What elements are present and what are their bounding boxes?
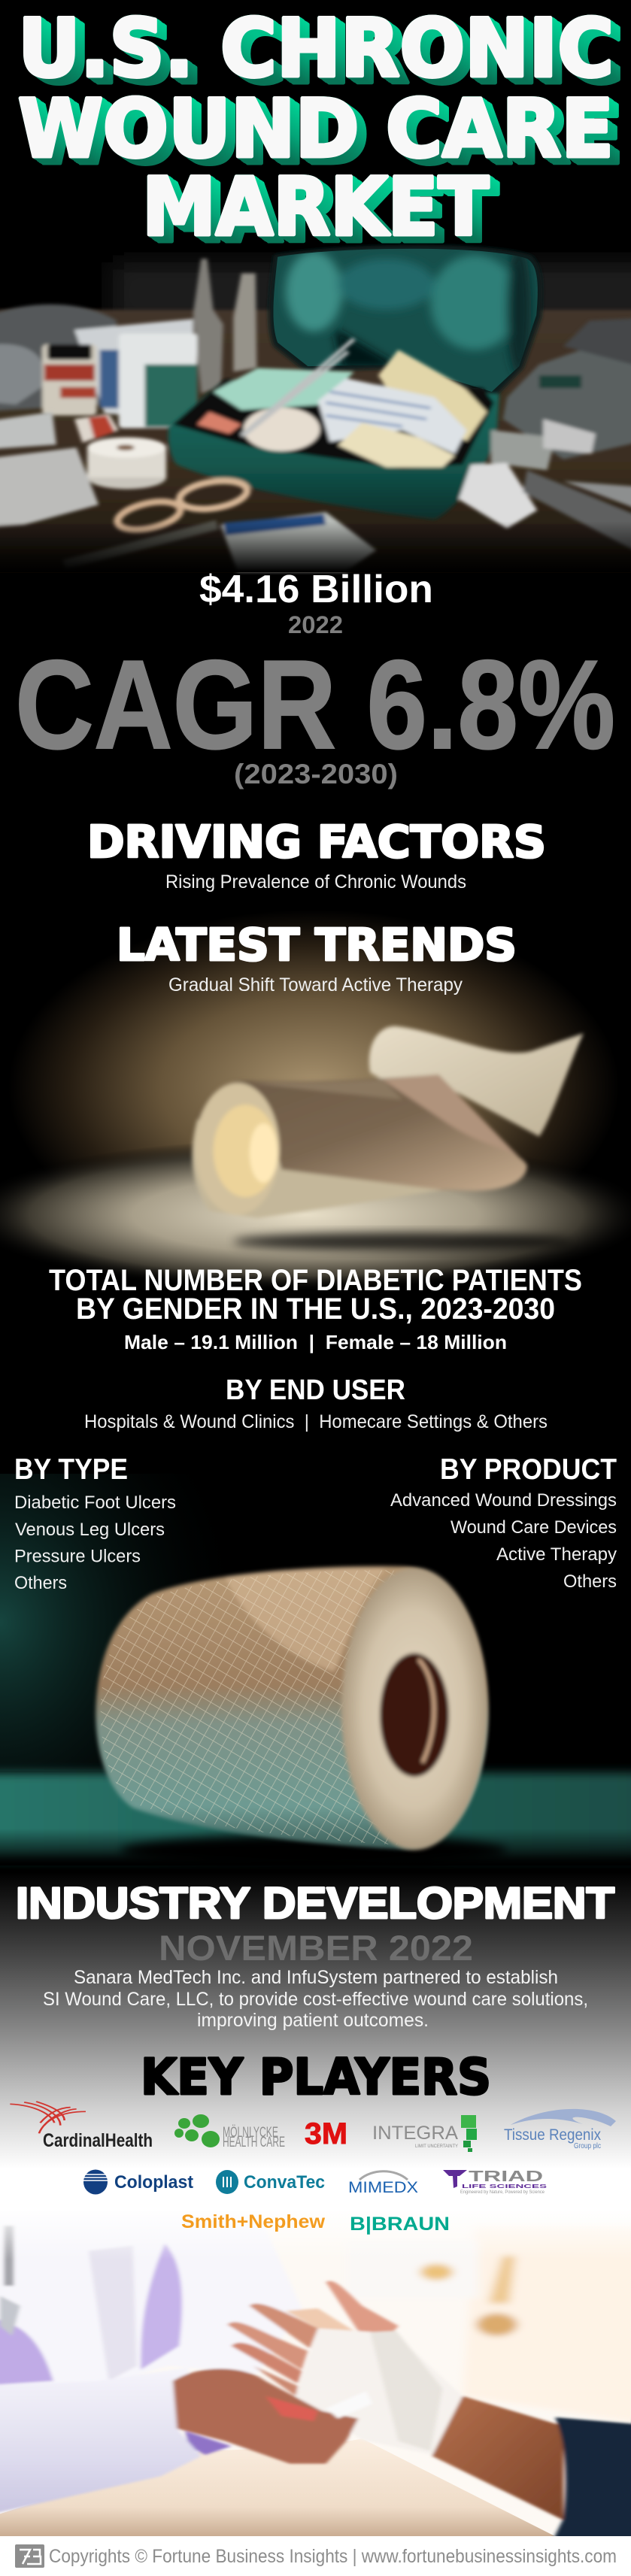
footer logo (15, 2544, 44, 2568)
logo: Integra (372, 2115, 477, 2152)
logo: Cardinal Health (10, 2102, 153, 2151)
logo: Tissue Regenix (504, 2109, 616, 2150)
logo: Tissue Regenix: Tissue Regenix (504, 2126, 601, 2144)
by product list (390, 1453, 617, 1592)
by type list: Diabetic Foot Ulcers (14, 1493, 176, 1513)
photo: tissue roll under spotlight (0, 910, 631, 1291)
diabetic patients stat: BY GENDER IN THE U.S., 2023-2030 (76, 1293, 555, 1326)
by product list: Active Therapy (496, 1544, 617, 1565)
white fade into photo (0, 2207, 631, 2259)
market value: $4.16 Billion (199, 568, 433, 611)
by end user: BY END USER (226, 1374, 405, 1406)
logo: Triad Life Sciences (443, 2168, 548, 2195)
industry development: INDUSTRY DEVELOPMENT (16, 1879, 614, 1928)
development description: Sanara MedTech Inc. and InfuSystem partnered to establish (74, 1967, 558, 1988)
logo: Triad Life Sciences: LIFE SCIENCES (462, 2184, 548, 2190)
market value (199, 568, 433, 638)
by end user (84, 1374, 548, 1432)
logo: Triad Life Sciences: Engineered by Nature, Powered by Science (460, 2190, 545, 2195)
by type list: Venous Leg Ulcers (15, 1520, 165, 1540)
market value: 2022 (288, 611, 343, 638)
logo: ConvaTec: ConvaTec (244, 2172, 325, 2193)
driving factors (87, 816, 546, 893)
photo: gauze roll (0, 1474, 631, 1867)
logo: Tissue Regenix: Group plc (574, 2142, 601, 2150)
development description (43, 1967, 588, 2031)
footer band (0, 2536, 631, 2576)
logo: Smith+Nephew: Smith+Nephew (181, 2211, 326, 2232)
by product list: BY PRODUCT (440, 1453, 617, 1486)
logo: Mimedx (348, 2171, 418, 2196)
title line 2: WOUND CARE (18, 83, 614, 175)
by type list: Others (14, 1573, 67, 1593)
logo: B. Braun: B|BRAUN (350, 2214, 450, 2235)
logo: 3M: 3M (305, 2117, 347, 2150)
logo: ConvaTec (216, 2170, 325, 2194)
driving factors: DRIVING FACTORS (87, 816, 546, 868)
diabetic patients stat (49, 1264, 582, 1353)
bag lid fabric (274, 248, 538, 392)
latest trends: Gradual Shift Toward Active Therapy (168, 974, 463, 996)
logo: Mimedx: MIMEDX (348, 2179, 418, 2196)
photo: first aid kit on table (0, 241, 631, 572)
title line 3: MARKET (142, 161, 489, 253)
by type list (14, 1453, 176, 1593)
logo: Coloplast: Coloplast (114, 2172, 193, 2193)
latest trends: LATEST TRENDS (117, 919, 517, 971)
logo: Molnlycke Health Care: MÖLNLYCKE (223, 2125, 278, 2141)
industry development (16, 1879, 614, 1968)
by end user: Hospitals & Wound Clinics | Homecare Settings & Others (84, 1411, 548, 1432)
by type list: BY TYPE (14, 1453, 128, 1486)
by product list: Others (563, 1571, 617, 1592)
by product list: Wound Care Devices (450, 1517, 617, 1538)
CAGR: (2023-2030) (234, 759, 398, 789)
logo: Integra: INTEGRA (372, 2123, 458, 2144)
photo: doctor bandaging a hand (0, 2211, 631, 2551)
driving factors: Rising Prevalence of Chronic Wounds (165, 871, 466, 893)
gradient panel (0, 1872, 631, 2293)
industry development: NOVEMBER 2022 (159, 1928, 473, 1968)
development description: improving patient outcomes. (197, 2010, 429, 2031)
latest trends (117, 919, 517, 996)
diabetic patients stat: TOTAL NUMBER OF DIABETIC PATIENTS (49, 1264, 582, 1297)
logo: Coloplast (83, 2170, 193, 2194)
title: U.S. CHRONIC (18, 2, 614, 95)
logo: Cardinal Health: CardinalHealth (43, 2130, 153, 2151)
logo: Integra: LIMIT UNCERTAINTY (415, 2144, 458, 2149)
logo: Molnlycke Health Care (174, 2114, 285, 2150)
logo: Molnlycke Health Care: HEALTH CARE (223, 2135, 285, 2150)
by type list: Pressure Ulcers (14, 1546, 141, 1567)
logo: Triad Life Sciences: TRIAD (469, 2168, 543, 2185)
development description: SI Wound Care, LLC, to provide cost-effective wound care solutions, (43, 1989, 588, 2010)
by product list: Advanced Wound Dressings (390, 1490, 617, 1511)
diabetic patients stat: Male – 19.1 Million | Female – 18 Million (124, 1331, 507, 1353)
key players heading: KEY PLAYERS (141, 2048, 491, 2106)
